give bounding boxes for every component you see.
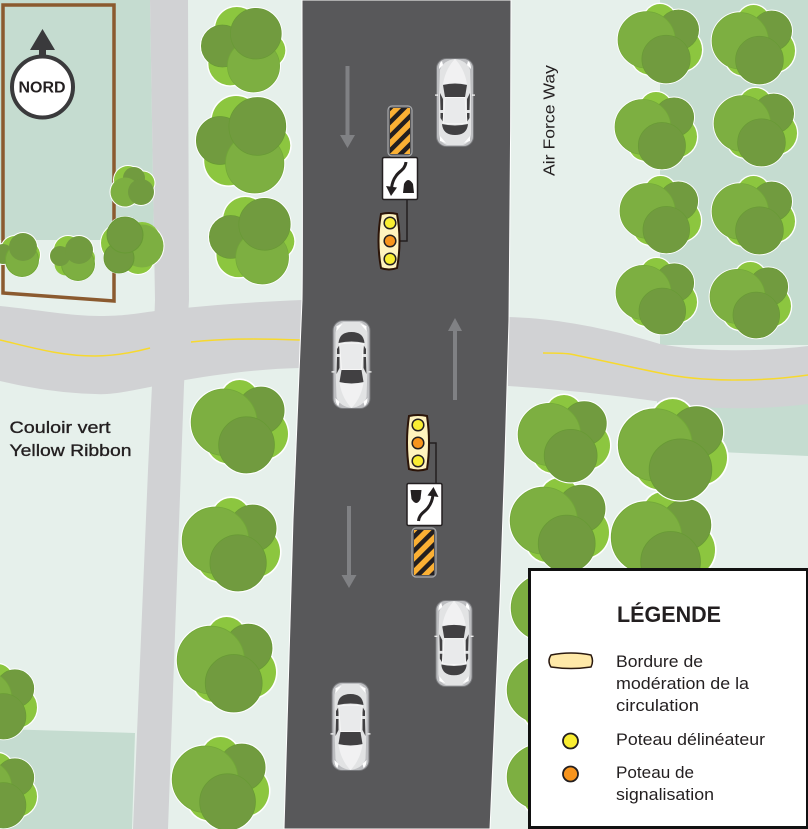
tree: lower right 1 xyxy=(517,394,611,483)
tree: left column 4 xyxy=(190,378,290,475)
tree: behind legend 2 xyxy=(506,646,606,742)
legend text: curb xyxy=(616,653,750,715)
curb median with posts upper xyxy=(378,213,400,270)
road arrow: southbound lower xyxy=(342,506,356,588)
tree: left edge lower xyxy=(0,752,38,829)
bush: center boundary xyxy=(49,235,96,282)
tree: right grid 4 xyxy=(713,87,798,167)
tree: left column 7 xyxy=(171,735,271,829)
tree: left column 2 xyxy=(195,94,292,195)
tree: right grid 7 xyxy=(615,257,698,335)
green corridor vertical path xyxy=(133,0,189,829)
legend heading: LÉGENDE xyxy=(617,602,721,627)
legend symbol: delineator post xyxy=(563,734,578,748)
green area: top right xyxy=(660,0,808,345)
tree: right grid 2 xyxy=(711,4,796,85)
legend panel xyxy=(530,570,808,828)
brown park boundary xyxy=(3,5,114,301)
keep-left sign xyxy=(382,158,418,200)
legend symbol: sign post xyxy=(563,766,578,782)
corridor label: Couloir vert Yellow Ribbon: Couloir vert xyxy=(10,418,111,437)
curb median with posts lower xyxy=(407,415,429,470)
left path yellow line B xyxy=(191,339,300,342)
legend text: sign post xyxy=(616,764,714,804)
legend text: curb: Bordure de xyxy=(616,653,703,671)
tree: lower right 2 xyxy=(617,397,729,502)
tree: left column 1 xyxy=(200,6,287,93)
car: top right lane xyxy=(435,58,475,146)
car: left lane bottom xyxy=(330,682,370,770)
green area: top left xyxy=(0,0,154,240)
legend text: curb: modération de la xyxy=(616,675,750,693)
street label: Air Force Way: Air Force Way xyxy=(542,65,558,176)
tree: left edge upper xyxy=(0,663,38,740)
tree: right grid 3 xyxy=(614,91,698,170)
legend text: curb: circulation xyxy=(616,697,699,715)
tree: behind legend 3 xyxy=(506,734,606,828)
tree: right grid 6 xyxy=(711,175,796,255)
left path yellow line A xyxy=(0,340,150,356)
right path yellow line xyxy=(543,353,808,380)
corridor label: Couloir vert Yellow Ribbon xyxy=(10,418,132,460)
legend text: sign post: signalisation xyxy=(616,786,714,804)
bush: left boundary xyxy=(0,232,41,278)
tree: left column 3 xyxy=(208,196,296,285)
legend text: sign post: Poteau de xyxy=(616,764,694,782)
tree: lower right 3 xyxy=(509,476,611,574)
road arrow: southbound upper xyxy=(340,66,355,148)
road xyxy=(284,0,511,829)
road arrow: northbound xyxy=(448,318,462,400)
car: lower right lane xyxy=(434,600,474,687)
traffic calming group: upper xyxy=(378,106,418,270)
right cross path xyxy=(508,317,808,408)
tree: left column 5 xyxy=(181,496,282,593)
legend symbol: curb xyxy=(549,653,592,668)
tree: right grid 1 xyxy=(617,3,703,84)
tree: left column 6 xyxy=(176,615,278,714)
north label: NORD xyxy=(18,80,66,96)
tree: behind legend 1 xyxy=(510,564,610,660)
hazard marker upper xyxy=(388,106,412,156)
car: left lane middle xyxy=(332,320,372,408)
corridor label: Couloir vert Yellow Ribbon: Yellow Ribbon xyxy=(10,441,132,460)
hazard marker lower xyxy=(412,528,436,577)
tree: right grid 8 xyxy=(709,261,792,339)
north dial xyxy=(12,56,73,118)
green area: bottom left xyxy=(0,729,135,829)
connector line upper xyxy=(390,199,407,241)
legend text: delineator post: Poteau délinéateur xyxy=(616,731,766,749)
bush: by the path xyxy=(110,165,156,208)
tree: right grid 5 xyxy=(619,175,702,254)
tree: lower right 4 xyxy=(610,490,717,594)
keep-right sign xyxy=(407,484,442,526)
left cross path xyxy=(0,300,302,394)
north compass xyxy=(12,29,73,118)
north arrow xyxy=(30,29,55,58)
connector line lower xyxy=(418,443,436,485)
green area: mid right xyxy=(657,395,808,456)
traffic calming group: lower xyxy=(407,415,442,577)
bush: large at boundary xyxy=(100,216,164,275)
